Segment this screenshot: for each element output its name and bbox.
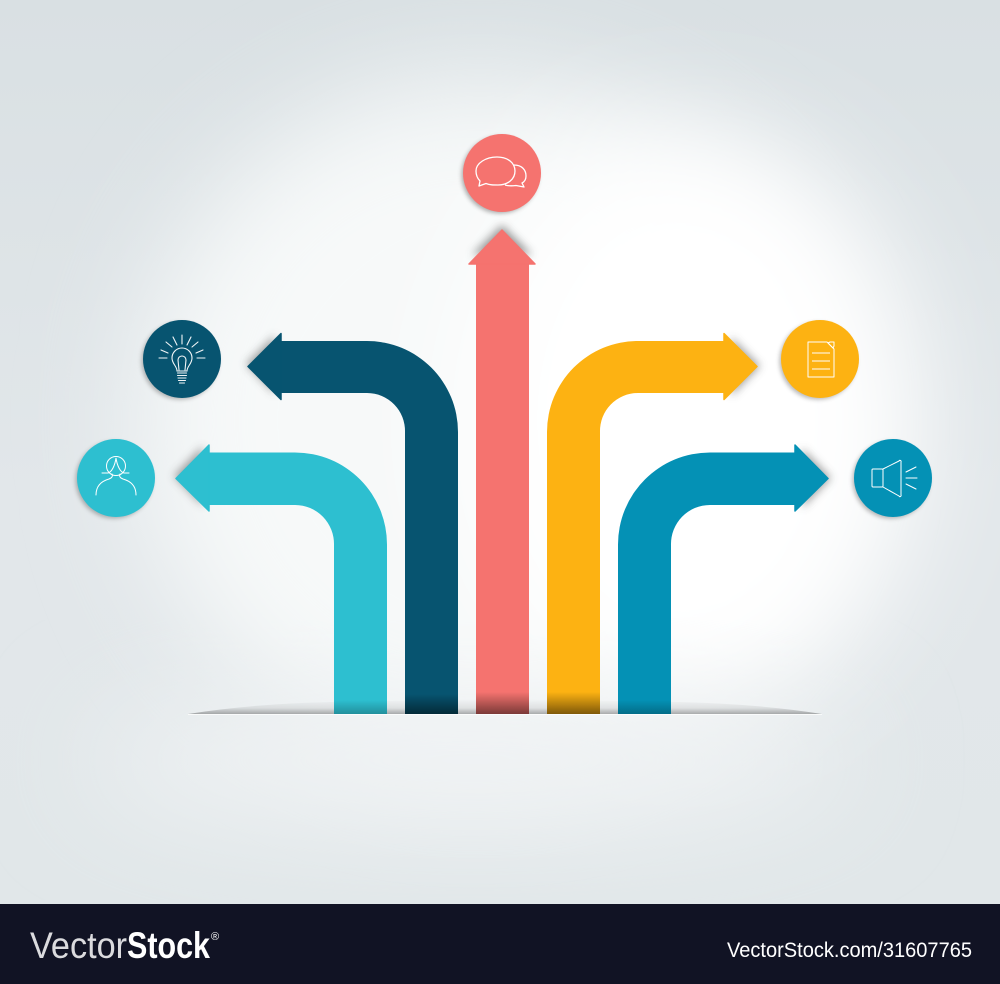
circle: blue speaker xyxy=(852,439,932,518)
circle: coral speech bubbles xyxy=(462,134,541,214)
arrow: dark teal, pointing left xyxy=(246,334,458,714)
logo: VectorStock xyxy=(30,925,219,966)
logo: VectorStock: Vector xyxy=(30,925,127,966)
icon: person xyxy=(96,456,136,495)
footer id text: VectorStock.com/31607765 xyxy=(727,939,972,962)
arrow: blue, pointing right xyxy=(618,445,831,714)
icon: document xyxy=(808,342,834,377)
circle: light teal person xyxy=(76,439,155,518)
floor shadow xyxy=(188,699,822,715)
logo: VectorStock: Stock xyxy=(127,925,210,966)
icon: speech bubbles xyxy=(476,157,526,187)
arrow: light teal, pointing left xyxy=(174,445,387,714)
icon: speaker xyxy=(872,460,917,497)
arrow: coral, pointing up xyxy=(469,225,535,714)
logo: VectorStock: ® xyxy=(211,931,219,943)
circle: dark teal light bulb xyxy=(142,320,221,400)
circle: amber document xyxy=(780,320,859,400)
arrow: amber, pointing right xyxy=(547,334,760,714)
footer bar xyxy=(0,904,1000,984)
icon: light bulb xyxy=(159,335,205,383)
